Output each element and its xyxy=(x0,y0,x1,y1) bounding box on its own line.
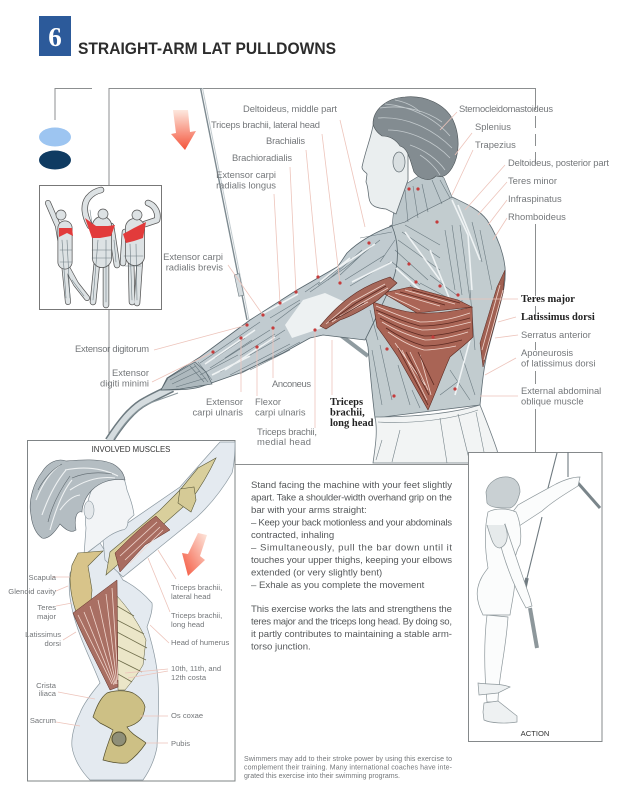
upper right labels: Trapezius xyxy=(475,139,516,150)
arm muscle fibres xyxy=(200,232,395,375)
cable and chain xyxy=(527,452,568,578)
page frame lines xyxy=(55,88,536,464)
hair xyxy=(373,97,458,179)
upper left labels: Anconeus xyxy=(272,378,311,389)
panel labels right: Triceps brachii, xyxy=(171,611,222,620)
face xyxy=(362,120,408,214)
neck and face xyxy=(84,472,134,555)
upper right labels: Aponeurosis xyxy=(521,347,573,358)
panel labels left: iliaca xyxy=(39,689,57,698)
instructions text: – Keep your back motionless and your abdominals xyxy=(251,518,452,528)
upper left labels: carpi ulnaris xyxy=(255,406,306,418)
upper left labels: digiti minimi xyxy=(100,378,149,388)
instructions text: apart. Take a shoulder-width overhand grip on the xyxy=(251,492,452,504)
lower legs xyxy=(485,615,508,702)
header: number badge: 6 xyxy=(48,22,62,52)
panel labels right: 10th, 11th, and xyxy=(171,664,221,673)
upper right labels: Serratus anterior xyxy=(521,329,591,340)
upper left labels: Extensor carpi xyxy=(163,251,223,262)
figure three xyxy=(123,203,157,303)
panel: action xyxy=(468,452,602,742)
bold triceps label: brachii, xyxy=(330,408,365,418)
upper left labels: Extensor digitorum xyxy=(75,343,149,354)
rope handles xyxy=(524,483,600,648)
bold triceps label xyxy=(330,397,374,429)
bold triceps label: long head xyxy=(330,418,374,429)
upper left labels: Extensor carpi xyxy=(216,169,276,180)
panel labels left: Sacrum xyxy=(30,716,56,725)
muscle marker dots xyxy=(211,187,460,398)
upper left labels: Flexor xyxy=(255,396,281,407)
upper left labels: Extensor xyxy=(112,367,149,378)
action figure xyxy=(477,452,600,723)
bold triceps label: Triceps xyxy=(330,397,363,408)
instructions text xyxy=(251,480,452,652)
arm bones xyxy=(106,458,216,575)
bar handle xyxy=(109,331,368,441)
inner arrow xyxy=(182,533,207,576)
teres major xyxy=(383,287,472,313)
latissimus dorsi muscle xyxy=(73,580,118,690)
panel heading: INVOLVED MUSCLES xyxy=(92,445,170,454)
panel labels left: Crista xyxy=(36,681,57,690)
hair xyxy=(486,477,520,508)
upper left labels: Brachioradialis xyxy=(232,152,292,163)
figure two xyxy=(85,190,117,305)
lateral latissimus strip xyxy=(480,270,505,367)
upper left labels: radialis longus xyxy=(216,180,276,190)
shoes xyxy=(478,683,517,723)
footnote xyxy=(244,756,453,780)
upper right labels: External abdominal xyxy=(521,385,601,396)
instructions text: teres major and the triceps long head. By doing so, xyxy=(251,616,452,628)
upper left labels: Triceps brachii, lateral head xyxy=(211,119,320,130)
instructions text: bar with your arms straight: xyxy=(251,505,367,516)
header: number badge xyxy=(39,16,71,56)
instructions text: This exercise works the lats and strengthens the xyxy=(251,604,452,615)
torso and hips xyxy=(477,509,521,615)
upper right labels xyxy=(459,103,609,406)
neck xyxy=(392,168,452,226)
upper right labels: Deltoideus, posterior part xyxy=(508,157,609,168)
inset: three figures xyxy=(40,186,162,310)
upper left labels xyxy=(75,103,337,447)
raised arm xyxy=(103,442,235,577)
upper left labels: Deltoideus, middle part xyxy=(243,103,337,114)
upper right labels: oblique muscle xyxy=(521,396,584,406)
title: STRAIGHT-ARM LAT PULLDOWNS xyxy=(78,39,336,58)
panel labels left: major xyxy=(37,612,56,621)
upper right labels: Sternocleidomastoideus xyxy=(459,103,553,114)
panel labels right: Os coxae xyxy=(171,711,203,720)
rib cage xyxy=(117,596,147,690)
ear xyxy=(393,152,405,172)
pelvis xyxy=(93,691,146,763)
panel labels left xyxy=(8,573,61,725)
back view torso xyxy=(358,197,505,418)
instructions text: touches your upper thighs, keeping your elbows xyxy=(251,555,452,566)
trousers xyxy=(373,405,500,463)
action caption: ACTION xyxy=(521,729,549,738)
leader lines xyxy=(52,550,176,743)
upper right labels: Rhomboideus xyxy=(508,211,566,222)
panel labels left: Teres xyxy=(37,603,56,612)
triceps long head xyxy=(320,277,397,329)
panel labels left: Scapula xyxy=(29,573,57,582)
upper right labels: Infraspinatus xyxy=(508,193,562,204)
triceps muscles xyxy=(115,516,170,572)
upper left labels: carpi ulnaris xyxy=(192,406,243,418)
hair strands xyxy=(378,100,452,175)
scapula xyxy=(70,551,103,612)
upper left labels: radialis brevis xyxy=(166,262,223,272)
instructions text: – Exhale as you complete the movement xyxy=(251,580,425,591)
figure one xyxy=(48,203,87,302)
upper left labels: Extensor xyxy=(206,396,243,407)
hair with ponytail xyxy=(30,460,125,538)
footnote: complement their training. Many international coaches have inte- xyxy=(244,764,453,772)
panel labels right: Pubis xyxy=(171,739,190,748)
body silhouette xyxy=(69,543,159,780)
panel labels left: Glenoid cavity xyxy=(8,587,56,596)
bikini top xyxy=(487,525,507,548)
forearm tendon highlight xyxy=(285,293,345,338)
upper right labels: Teres minor xyxy=(508,175,557,186)
panel labels right xyxy=(171,583,229,748)
panel: involved muscles xyxy=(8,440,235,781)
instructions text: torso junction. xyxy=(251,642,311,652)
leader lines xyxy=(152,112,518,428)
arm highlights xyxy=(205,244,392,375)
panel labels left: dorsi xyxy=(45,639,61,648)
panel labels right: long head xyxy=(171,620,204,629)
upper right labels: Teres major xyxy=(521,294,575,305)
instructions text: contracted, inhaling xyxy=(251,530,334,541)
instructions text: Stand facing the machine with your feet slightly xyxy=(251,480,452,491)
hand on bar xyxy=(161,362,212,390)
upper left labels: Triceps brachii, xyxy=(257,426,317,437)
panel labels right: Head of humerus xyxy=(171,638,229,647)
arms xyxy=(505,477,580,528)
panel labels right: 12th costa xyxy=(171,673,207,682)
instructions text: it partly contributes to maintaining a stable arm- xyxy=(251,629,452,640)
upper right labels: Splenius xyxy=(475,121,511,132)
panel labels right: lateral head xyxy=(171,592,211,601)
back highlight ridges xyxy=(396,200,480,395)
footnote: grated this exercise into their swimming programs. xyxy=(244,773,400,780)
upper right labels: of latissimus dorsi xyxy=(521,358,596,368)
upper right labels: Latissimus dorsi xyxy=(521,312,595,323)
main figure xyxy=(109,88,518,463)
instructions text: – Simultaneously, pull the bar down until it xyxy=(251,542,452,554)
main arrow xyxy=(171,110,196,150)
upper left labels: Brachialis xyxy=(266,135,305,146)
latissimus dorsi xyxy=(373,302,473,410)
cable xyxy=(200,88,249,320)
ear xyxy=(84,501,94,519)
panel labels right: Triceps brachii, xyxy=(171,583,222,592)
upper left labels: medial head xyxy=(257,436,311,447)
arm xyxy=(161,226,397,390)
footnote: Swimmers may add to their stroke power by using this exercise to xyxy=(244,756,452,763)
instructions text: extended (or very slightly bent) xyxy=(251,568,382,578)
lowering arm xyxy=(498,524,532,608)
legend ovals xyxy=(39,128,71,170)
panel labels left: Latissimus xyxy=(25,630,61,639)
shoulder and back fibres xyxy=(370,222,492,408)
